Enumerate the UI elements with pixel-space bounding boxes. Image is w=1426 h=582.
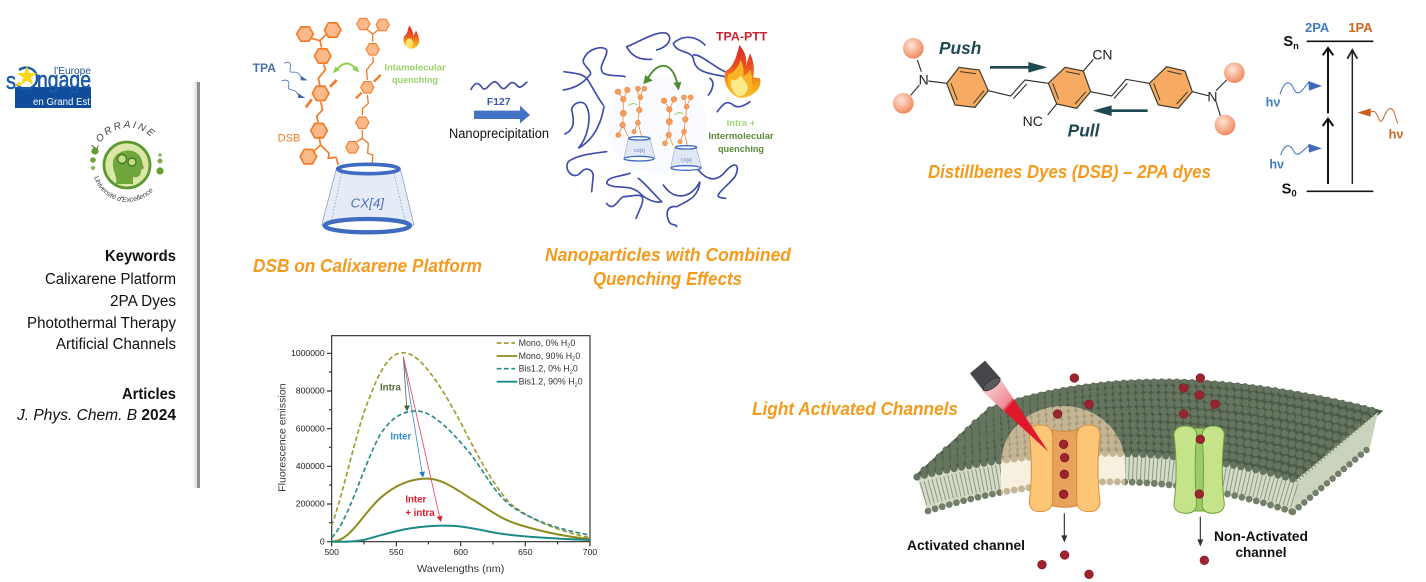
- y tick labels: 800000: [296, 386, 325, 396]
- legend: 0: [573, 364, 578, 374]
- heading: Distillbenes Dyes (DSB) - 2PA dyes: Distillbenes Dyes (DSB) – 2PA dyes: [928, 162, 1211, 182]
- vertical divider: [192, 82, 200, 488]
- logo: L'Europe s'engage en Grand Est: s: [6, 68, 16, 95]
- calixarene cone: CX[4]: [351, 195, 384, 210]
- inner cone left: CX[4]: [634, 148, 645, 153]
- blue photon upper: hν: [1266, 96, 1280, 110]
- blue photon lower: [1269, 144, 1322, 171]
- light activated zone: [1001, 406, 1125, 496]
- axis titles: Fluorescence emission: [278, 383, 289, 492]
- pull label and arrow: Pull: [1068, 121, 1101, 141]
- blue photon lower: hν: [1269, 157, 1284, 171]
- legend: 0: [575, 351, 580, 361]
- calixarene cone: [322, 164, 414, 232]
- panel: DSB on calixarene platform: [253, 18, 446, 232]
- axis titles: Wavelengths (nm): [417, 564, 504, 575]
- logo: Lorraine Université d'Excellence: [90, 120, 164, 202]
- panel: fluorescence chart: [278, 336, 597, 575]
- laser beam: [982, 378, 1048, 452]
- text block: articles: J. Phys. Chem. B 2024: [16, 407, 176, 424]
- non-activated channel: [1174, 426, 1224, 513]
- ions: [1038, 374, 1219, 579]
- DSB label: DSB: [278, 132, 300, 144]
- icon: large flame: [725, 45, 760, 98]
- F127 label: F127: [487, 97, 511, 108]
- TPA-PTT label: TPA-PTT: [716, 31, 767, 44]
- heading: Light Activated Channels: Light Activated Channels: [752, 399, 958, 419]
- pull label and arrow: [1068, 105, 1148, 141]
- panel: energy diagram: [1266, 20, 1403, 199]
- blue photon upper: [1266, 81, 1322, 110]
- intra + intermolecular quenching label: [708, 118, 774, 154]
- energy levels: [1307, 41, 1373, 191]
- atom labels: CN: [1092, 46, 1113, 62]
- 2PA and 1PA labels: 2PA: [1305, 20, 1330, 35]
- membrane front bilayer: [917, 453, 1296, 512]
- text block: keywords: Photothermal Therapy: [27, 315, 176, 332]
- polymer shell: [563, 33, 750, 227]
- right DSB chain: [346, 18, 389, 163]
- y tick labels: 400000: [296, 461, 325, 471]
- logo: L'Europe s'engage en Grand Est: ngage: [37, 67, 91, 94]
- activated channel label: Activated channel: [907, 538, 1025, 553]
- level labels: [1282, 34, 1299, 199]
- curve labels: Intra: [380, 383, 402, 394]
- legend: 2: [567, 344, 570, 350]
- process arrow: [474, 106, 530, 123]
- 2PA and 1PA labels: [1305, 20, 1373, 35]
- intermolecular arrow: [643, 66, 681, 91]
- non-activated channel label: channel: [1236, 545, 1286, 560]
- TPA label and photons: [253, 61, 308, 98]
- orange photon: [1357, 108, 1403, 141]
- icon: small flame: [403, 26, 419, 49]
- text block: keywords: 2PA Dyes: [110, 293, 176, 310]
- arrow: inter + intra: [403, 357, 442, 522]
- logo: Lorraine Université d'Excellence: LORRAINE: [91, 120, 156, 148]
- heading: Nanoparticles with Combined Quenching Effects: Quenching Effects: [593, 269, 742, 289]
- curve: Bis1.2 0%: [332, 411, 590, 538]
- legend: 2: [570, 369, 573, 375]
- heading: Nanoparticles with Combined Quenching Effects: Nanoparticles with Combined: [545, 245, 792, 265]
- non-activated channel label: [1214, 529, 1308, 560]
- level labels: S: [1282, 182, 1291, 198]
- panel: distyrylbenzene structure: [893, 38, 1245, 141]
- nanoprecipitation label: Nanoprecipitation: [449, 126, 549, 141]
- y tick labels: 0: [320, 536, 325, 546]
- inner molecules left: [615, 86, 647, 137]
- arrow: activated flow: [1061, 513, 1067, 543]
- intramolecular quenching label: quenching: [392, 75, 438, 85]
- intra + intermolecular quenching label: Intermolecular: [708, 131, 774, 141]
- panel: F127 nanoprecipitation arrow: [471, 82, 530, 123]
- intramolecular quenching label: [384, 62, 446, 85]
- bonds: [911, 59, 1227, 117]
- text block: keywords: Keywords: [105, 248, 176, 265]
- push label and arrow: Push: [939, 38, 981, 58]
- logo: L'Europe s'engage en Grand Est: l'Europe: [54, 65, 91, 77]
- curve labels: Inter: [390, 431, 411, 442]
- axes frame: [327, 336, 590, 546]
- y tick labels: 600000: [296, 423, 325, 433]
- intra + intermolecular quenching label: quenching: [718, 144, 764, 154]
- arrow: non-activated flow: [1197, 517, 1203, 547]
- heading: Nanoparticles with Combined Quenching Effects: [545, 245, 792, 289]
- level labels: n: [1293, 41, 1299, 51]
- legend: Mono, 0% H: [519, 338, 567, 348]
- x tick labels: 550: [389, 547, 404, 557]
- legend: 0: [570, 338, 575, 348]
- x tick labels: [324, 547, 597, 557]
- membrane side face: [1293, 412, 1378, 512]
- x tick labels: 600: [453, 547, 468, 557]
- logo: L'Europe s'engage en Grand Est: [6, 65, 91, 108]
- membrane top surface: [917, 382, 1378, 480]
- logo: L'Europe s'engage en Grand Est: en Grand Est: [33, 97, 90, 108]
- push label and arrow: [939, 38, 1047, 73]
- curve: Mono 90%: [332, 479, 590, 542]
- x tick labels: 650: [518, 547, 533, 557]
- substituent balls: [893, 38, 1245, 135]
- x tick labels: 700: [583, 547, 597, 557]
- level labels: S: [1283, 34, 1293, 50]
- activated channel: [1029, 425, 1100, 512]
- two photon arrows: [1323, 48, 1333, 184]
- y tick labels: 1000000: [291, 348, 325, 358]
- aromatic rings: [947, 67, 1192, 108]
- atom labels: NC: [1023, 113, 1043, 129]
- curve labels: Inter: [405, 494, 426, 505]
- panel: nanoparticle: [563, 31, 774, 227]
- atom labels: N: [1207, 88, 1217, 104]
- non-activated channel label: Non-Activated: [1214, 529, 1308, 544]
- legend: Bis1.2, 0% H: [519, 364, 570, 374]
- legend: [497, 338, 583, 388]
- logo: Lorraine Université d'Excellence: Université d'Excellence: [94, 176, 152, 202]
- inner cone right: [671, 146, 702, 170]
- F127 polymer wave: [471, 82, 527, 90]
- one photon arrow: [1347, 50, 1357, 184]
- intramolecular quenching label: Intamolecular: [384, 62, 446, 72]
- panel: membrane with channels: [907, 361, 1378, 579]
- curve labels: + intra: [405, 508, 435, 519]
- legend: 2: [572, 357, 575, 363]
- text block: keywords: [27, 248, 176, 353]
- inner cone left: [624, 137, 655, 161]
- level labels: 0: [1291, 189, 1297, 199]
- legend: 0: [578, 377, 583, 387]
- inner molecules right: [661, 95, 693, 146]
- small green arrows: [628, 104, 683, 115]
- inner cone right: CX[4]: [681, 157, 691, 162]
- intramolecular arrow: [333, 63, 359, 73]
- text block: keywords: Calixarene Platform: [45, 271, 176, 288]
- intra + intermolecular quenching label: Intra +: [727, 118, 755, 128]
- 2PA and 1PA labels: 1PA: [1348, 20, 1373, 35]
- TPA label and photons: TPA: [253, 61, 276, 75]
- heading: DSB on Calixarene Platform: DSB on Calixarene Platform: [253, 256, 482, 276]
- icon: laser head: [970, 361, 1002, 393]
- arrow: intra: [403, 357, 410, 411]
- x tick labels: 500: [324, 547, 339, 557]
- arrow: inter: [403, 357, 425, 478]
- curve: Mono 0%: [332, 353, 590, 538]
- legend: Bis1.2, 90% H: [519, 377, 575, 387]
- axis titles: [278, 383, 504, 575]
- text block: keywords: Artificial Channels: [56, 336, 176, 353]
- y tick labels: 200000: [296, 499, 325, 509]
- left DSB chain: [297, 23, 341, 165]
- legend: 2: [575, 382, 578, 388]
- y tick labels: [291, 348, 325, 546]
- text block: articles: [16, 386, 176, 424]
- atom labels: N: [919, 71, 929, 87]
- text block: articles: Articles: [122, 386, 176, 403]
- orange photon: hν: [1389, 127, 1403, 141]
- legend: Mono, 90% H: [519, 351, 572, 361]
- curve: Bis1.2 90%: [332, 526, 590, 542]
- ring inner bonds: [951, 71, 1188, 104]
- atom labels: [919, 46, 1217, 129]
- curve labels: [380, 383, 435, 519]
